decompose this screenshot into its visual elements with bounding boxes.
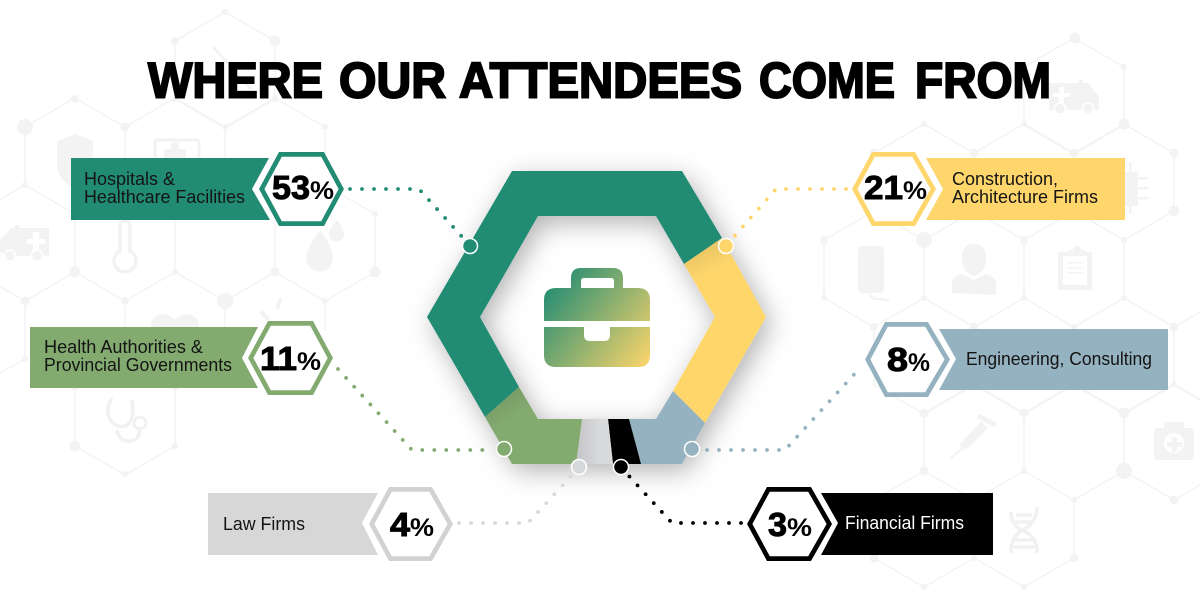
title: WHERE bbox=[148, 52, 323, 108]
label: construction 21%: Construction, bbox=[952, 168, 1058, 189]
icon: stethoscope bbox=[108, 398, 139, 441]
label: construction 21%: % bbox=[903, 177, 927, 205]
label: engineering 8% bbox=[868, 324, 1168, 395]
label: financial firms 3%: Financial Firms bbox=[845, 512, 964, 533]
icon: virus bbox=[259, 298, 282, 321]
segment: health authorities 11% bbox=[485, 387, 582, 464]
label: engineering 8%: 8 bbox=[887, 341, 908, 378]
connector: health authorities bbox=[338, 369, 492, 450]
label: law firms 4% bbox=[208, 489, 450, 559]
hexagon ring segments bbox=[427, 171, 766, 464]
title: COME bbox=[759, 52, 895, 108]
segment: financial 3% bbox=[608, 419, 641, 464]
label: hospitals 53%: Healthcare Facilities bbox=[84, 186, 245, 207]
icon: left ambulance wheels bbox=[5, 250, 43, 261]
icon: thermometer bbox=[114, 221, 136, 272]
label: construction 21%: 21 bbox=[864, 169, 903, 206]
central hexagon chart bbox=[427, 171, 766, 464]
icon: shield bbox=[57, 134, 93, 189]
label: law firms 4%: % bbox=[410, 514, 434, 542]
label: construction 21% bbox=[855, 154, 1125, 224]
icon: infusion pump bbox=[858, 246, 884, 293]
connector: law bbox=[459, 475, 572, 523]
label: financial firms 3%: 3 bbox=[768, 506, 787, 543]
label: health authorities 11% bbox=[30, 323, 330, 393]
icon: right ambulance wheels bbox=[1055, 103, 1094, 114]
icon: first aid kit bbox=[1154, 422, 1194, 460]
title: FROM bbox=[915, 52, 1051, 108]
label: hospitals 53% bbox=[71, 154, 341, 224]
icon: needle bbox=[213, 47, 251, 89]
label: health authorities 11%: % bbox=[297, 348, 321, 376]
marker dots bbox=[462, 238, 734, 474]
icon: water drops bbox=[306, 220, 344, 272]
label: hospitals 53%: Hospitals & bbox=[84, 168, 176, 189]
label: hospitals 53%: 53 bbox=[272, 169, 310, 206]
icon: left ambulance bbox=[0, 225, 49, 256]
label: construction 21%: Architecture Firms bbox=[952, 186, 1098, 207]
title: OUR bbox=[339, 52, 446, 108]
inner white hexagon bbox=[480, 216, 715, 419]
icon: syringe bbox=[959, 414, 997, 449]
icon: right ambulance bbox=[1049, 80, 1099, 110]
connector: construction bbox=[731, 189, 846, 240]
label: engineering 8%: % bbox=[908, 349, 930, 377]
icon: briefcase bbox=[544, 268, 650, 367]
segment: engineering 8% bbox=[629, 391, 705, 464]
label: health authorities 11%: Provincial Governments bbox=[44, 354, 232, 375]
label: health authorities 11%: 11 bbox=[260, 340, 297, 377]
connector: hospitals bbox=[350, 189, 464, 239]
connector: financial bbox=[628, 475, 741, 523]
icon: doctor bbox=[952, 244, 996, 295]
icon: medical kit bbox=[155, 140, 199, 160]
segment: construction 21% bbox=[673, 238, 766, 423]
label: health authorities 11%: Health Authorities & bbox=[44, 336, 204, 357]
icon: first aid cross bbox=[1167, 437, 1182, 452]
icon: heart bbox=[151, 314, 199, 327]
icon: chip bbox=[1125, 162, 1148, 214]
label: financial firms 3% bbox=[750, 489, 993, 559]
segment: hospitals 53% bbox=[427, 171, 722, 417]
label: law firms 4%: 4 bbox=[390, 506, 411, 543]
label: engineering 8%: Engineering, Consulting bbox=[966, 348, 1152, 369]
title: ATTENDEES bbox=[459, 52, 742, 108]
label: financial firms 3%: % bbox=[787, 514, 812, 542]
label: hospitals 53%: % bbox=[310, 177, 334, 205]
icon: clipboard bbox=[1058, 246, 1092, 290]
segment: law 4% bbox=[576, 419, 613, 464]
icon: medical kit cross bbox=[164, 143, 186, 158]
label: law firms 4%: Law Firms bbox=[223, 513, 305, 534]
icon: DNA helix bbox=[1011, 507, 1037, 553]
connector: engineering bbox=[707, 369, 859, 450]
